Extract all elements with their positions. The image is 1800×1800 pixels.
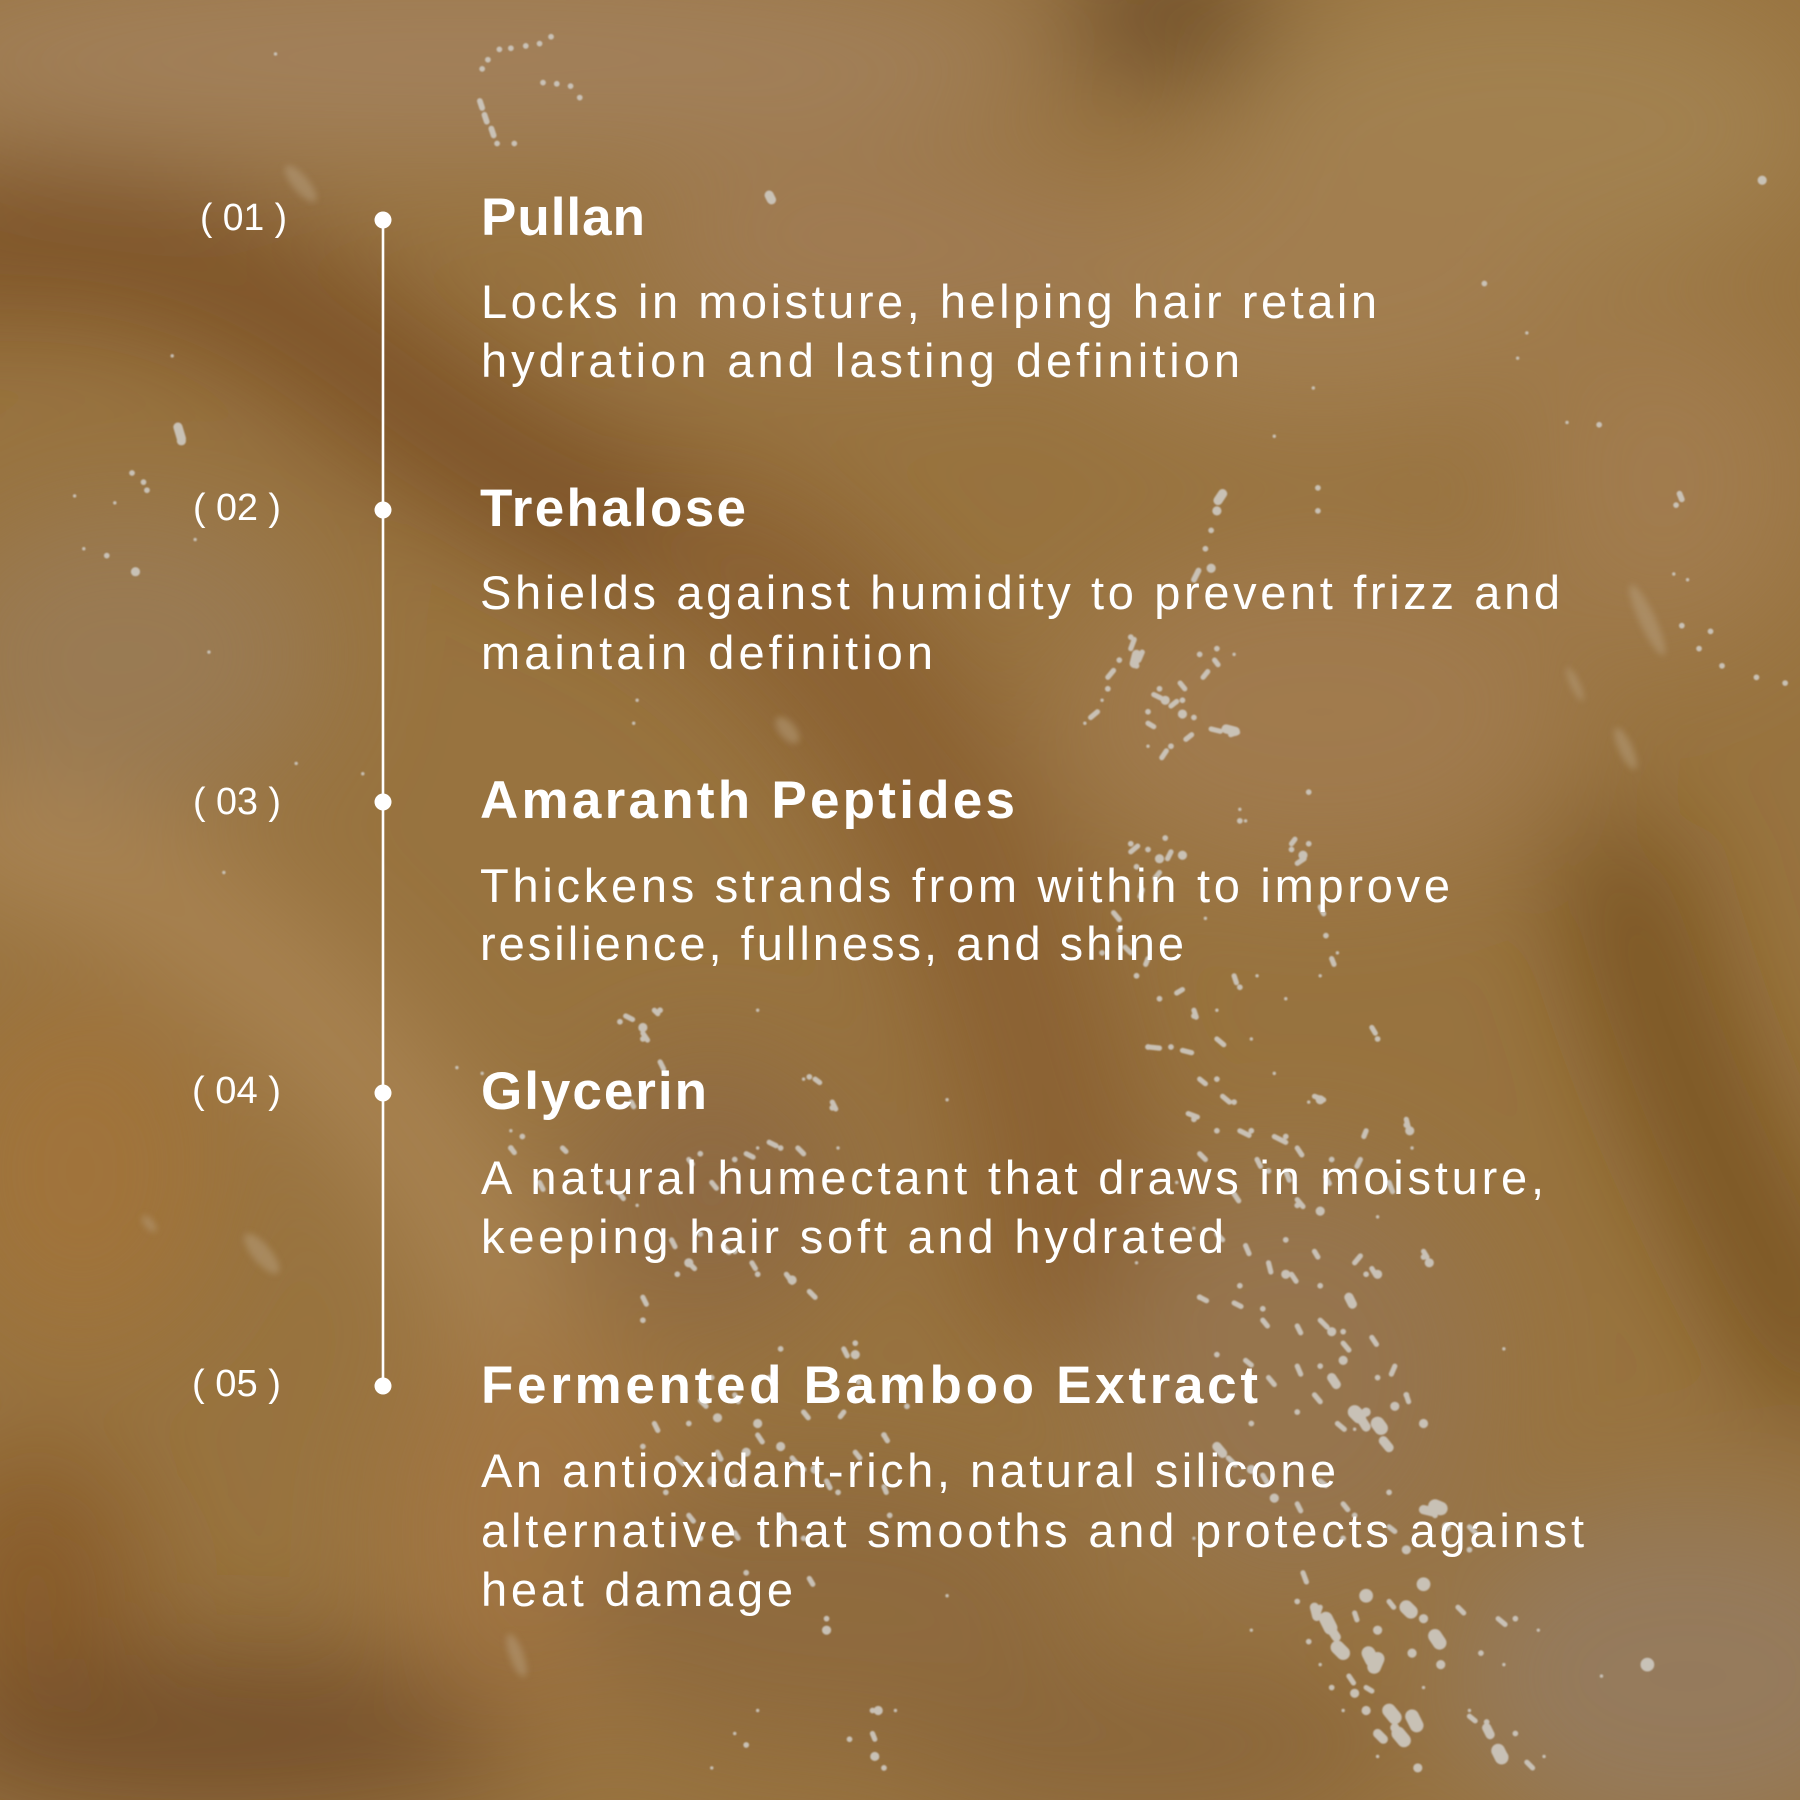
description: Amaranth Peptides: Thickens strands from within to improve <box>480 859 1450 912</box>
number 02: ( 02 ) <box>193 487 281 529</box>
description: Pullan: hydration and lasting definition <box>481 334 1240 387</box>
heading: Amaranth Peptides: Amaranth Peptides <box>480 771 1015 830</box>
description: Fermented Bamboo Extract: An antioxidant-rich, natural silicone <box>481 1444 1336 1497</box>
description: Amaranth Peptides <box>480 859 1450 970</box>
glossy droplets <box>139 161 1671 1679</box>
number 05: ( 05 ) <box>192 1363 281 1405</box>
node 01 <box>374 212 392 228</box>
node 05 <box>374 1378 392 1394</box>
number 03: ( 03 ) <box>193 781 281 823</box>
node 04 <box>374 1084 392 1102</box>
description: Glycerin: keeping hair soft and hydrated <box>481 1210 1224 1263</box>
description: Glycerin <box>481 1151 1544 1263</box>
item 03: Amaranth Peptides <box>193 771 1450 970</box>
description: Trehalose: maintain definition <box>481 626 933 679</box>
item 01: Pullan <box>200 188 1377 387</box>
description: Fermented Bamboo Extract: alternative that smooths and protects against <box>481 1504 1584 1557</box>
heading: Trehalose: Trehalose <box>480 479 746 538</box>
node 03 <box>374 794 392 810</box>
description: Fermented Bamboo Extract <box>481 1444 1584 1616</box>
number 04: ( 04 ) <box>192 1070 281 1112</box>
description: Amaranth Peptides: resilience, fullness, and shine <box>480 917 1184 970</box>
number 01: ( 01 ) <box>200 197 287 239</box>
description: Fermented Bamboo Extract: heat damage <box>481 1563 793 1616</box>
timeline <box>374 212 392 1394</box>
node 02 <box>374 502 392 518</box>
timeline vertical line <box>382 220 384 1386</box>
heading: Glycerin: Glycerin <box>481 1062 707 1121</box>
heading: Pullan: Pullan <box>481 188 645 247</box>
item 04: Glycerin <box>192 1062 1544 1263</box>
description: Glycerin: A natural humectant that draws in moisture, <box>481 1151 1544 1204</box>
item 05: Fermented Bamboo Extract <box>192 1356 1584 1616</box>
item 02: Trehalose <box>193 479 1560 679</box>
description: Pullan <box>481 275 1377 387</box>
heading: Fermented Bamboo Extract: Fermented Bamboo Extract <box>481 1356 1258 1415</box>
description: Trehalose <box>480 566 1560 679</box>
description: Pullan: Locks in moisture, helping hair retain <box>481 275 1377 328</box>
description: Trehalose: Shields against humidity to prevent frizz and <box>480 566 1560 619</box>
